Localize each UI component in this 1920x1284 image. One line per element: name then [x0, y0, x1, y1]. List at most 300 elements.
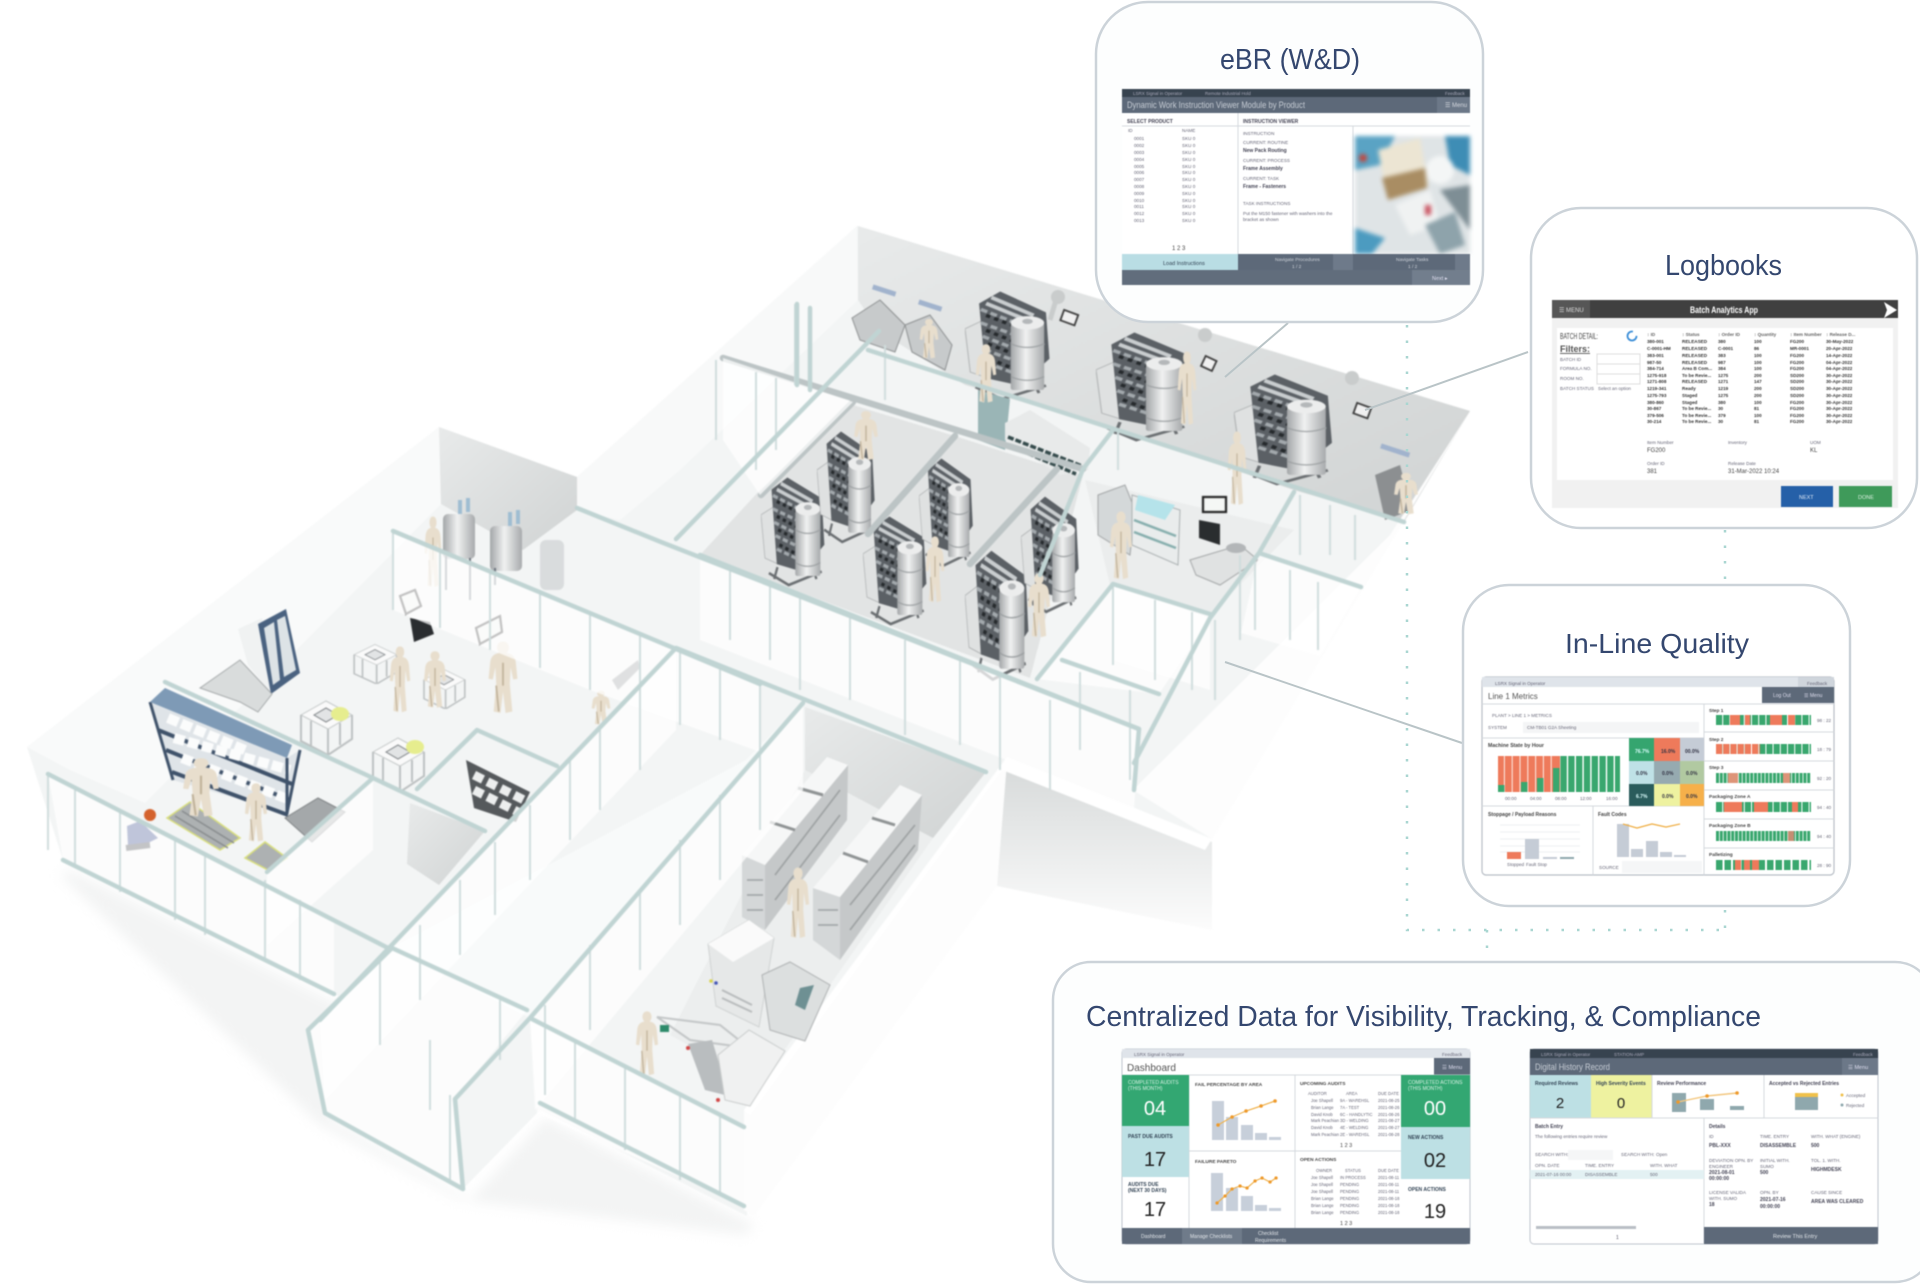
tile: past due audits — [1122, 1126, 1189, 1177]
screen: work instruction viewer: 0004 — [1134, 157, 1145, 162]
dashboard footer tabs: Requirements — [1255, 1238, 1287, 1244]
screen: work instruction viewer: 0013 — [1134, 218, 1145, 223]
table: upcoming audits: 2021-08-26 — [1378, 1112, 1400, 1117]
batch details: 500 — [1811, 1143, 1820, 1149]
table: upcoming audits: 6C - HANDLYTIC — [1340, 1112, 1372, 1117]
screen: batch analytics app: 383 — [1718, 353, 1726, 358]
screen: batch analytics app: C-0001 — [1718, 346, 1734, 351]
table: upcoming audits: 9A - WAREHSL — [1340, 1098, 1370, 1103]
screen: batch analytics app: 200 — [1754, 386, 1762, 391]
screen: batch analytics app: To be Revie... — [1682, 419, 1711, 424]
screen: batch analytics app: 81 — [1754, 419, 1760, 424]
upper wing glass walls — [676, 304, 1404, 810]
batch details: 2021-07-16 — [1760, 1197, 1786, 1203]
screen: batch analytics app: 380-001 — [1647, 339, 1664, 344]
screen: work instruction viewer: INSTRUCTION VIEWER — [1243, 119, 1299, 125]
screen: work instruction viewer: New Pack Routing — [1243, 148, 1287, 154]
tile: required reviews — [1530, 1075, 1591, 1118]
screen: digital history record: LSRX Signal in Operator — [1541, 1052, 1591, 1057]
tile: completed audits: COMPLETED AUDITS — [1128, 1080, 1179, 1086]
screen: batch analytics app: 1271 — [1718, 379, 1729, 384]
screen: batch analytics app: RELEASED — [1682, 346, 1708, 351]
chart: state heatmap — [1629, 738, 1704, 806]
batch details: PBL-XXX — [1709, 1143, 1731, 1149]
screen: work instruction viewer: CURRENT: PROCESS — [1243, 158, 1290, 163]
screen: work instruction viewer: TASK INSTRUCTIONS — [1243, 201, 1290, 206]
screen: work instruction viewer: Feedback — [1445, 91, 1466, 96]
table: upcoming audits — [1300, 1081, 1400, 1149]
table: open actions: PENDING — [1340, 1210, 1359, 1215]
screen: work instruction viewer: Remote Industrial Hold — [1205, 91, 1251, 96]
screen: batch analytics app: 100 — [1754, 339, 1762, 344]
screen: work instruction viewer: Dynamic Work Instruction Viewer Module by Product — [1127, 100, 1305, 111]
table: open actions: PENDING — [1340, 1203, 1359, 1208]
screen: batch analytics app: 100 — [1754, 353, 1762, 358]
screen: batch analytics app: Inventory — [1728, 440, 1748, 445]
upper wing side wall — [577, 226, 858, 520]
screen: batch analytics app: 384 — [1718, 366, 1726, 371]
chart: failure pareto: FAILURE PARETO — [1195, 1159, 1237, 1165]
screen: work instruction viewer: Load Instructions — [1163, 261, 1205, 267]
screen: batch analytics app: 30-Apr-2022 — [1826, 373, 1853, 378]
chart: state heatmap: 16.0% — [1661, 749, 1676, 755]
table: upcoming audits: Joe Shapell — [1311, 1098, 1333, 1103]
tile: audits due: (NEXT 30 DAYS) — [1128, 1188, 1167, 1194]
heading: eBR: eBR (W&D) — [1220, 44, 1360, 76]
table: open actions: Brian Lange — [1311, 1203, 1334, 1208]
equipment room floor — [1085, 480, 1294, 625]
chart: stoppage: Stopped — [1507, 862, 1525, 867]
batch entry list: 500 — [1650, 1172, 1658, 1177]
table: open actions: 2021-08-11 — [1378, 1189, 1400, 1194]
screen: work instruction viewer: INSTRUCTION — [1243, 131, 1274, 136]
tile: open actions: 19 — [1424, 1201, 1446, 1223]
screen: work instruction viewer: SKU 0 — [1182, 136, 1196, 141]
screen: line metrics dashboard: ☰ Menu — [1804, 693, 1823, 699]
tile: audits due: AUDITS DUE — [1128, 1182, 1159, 1188]
screen: batch analytics app: Order ID — [1647, 461, 1665, 466]
screen: batch analytics app: Staged — [1682, 400, 1698, 405]
batch details: ID — [1709, 1134, 1714, 1139]
screen: work instruction viewer: CURRENT: TASK — [1243, 176, 1280, 181]
screen: batch analytics app: FG200 — [1647, 448, 1666, 454]
screen: work instruction viewer: 1 2 3 — [1172, 246, 1186, 252]
screen: batch analytics app: 30-Apr-2022 — [1826, 400, 1853, 405]
screen: work instruction viewer: 0002 — [1134, 143, 1145, 148]
screen: batch analytics app: UOM — [1810, 440, 1821, 445]
screen: work instruction viewer: SKU 0 — [1182, 164, 1196, 169]
chart: state heatmap: 00.0% — [1685, 749, 1700, 755]
screen: batch analytics app: RELEASED — [1682, 339, 1708, 344]
screen: work instruction viewer: 0012 — [1134, 211, 1145, 216]
screen: batch analytics app: BATCH DETAIL: — [1560, 331, 1598, 341]
screen: work instruction viewer: SKU 0 — [1182, 191, 1196, 196]
screen: batch analytics app: Area B Com... — [1682, 366, 1712, 371]
screen: work instruction viewer: NAME — [1182, 128, 1195, 133]
screen: work instruction viewer: SKU 0 — [1182, 170, 1196, 175]
screen: audit dashboard: Feedback — [1442, 1052, 1463, 1057]
chart: machine state bars: 12:00 — [1580, 796, 1592, 801]
screen: batch analytics app: 380-860 — [1647, 400, 1664, 405]
screen: line metrics dashboard: Feedback — [1807, 681, 1828, 686]
screen: batch analytics app: BATCH STATUS — [1560, 386, 1594, 391]
screen: batch analytics app: Item Number — [1647, 440, 1674, 445]
screen: batch analytics app: FG200 — [1790, 366, 1804, 371]
batch details: TOL. 1. WITH. — [1811, 1158, 1841, 1163]
lower wing storage racks — [742, 757, 922, 960]
screen: batch analytics app: 31-Mar-2022 10:24 — [1728, 469, 1780, 475]
batch details: ENGINEER — [1709, 1164, 1734, 1169]
table: open actions: 2021-08-18 — [1378, 1210, 1400, 1215]
corridor floor — [392, 705, 800, 1018]
reactor room floor — [700, 405, 1083, 678]
chart: accepted vs rejected: Accepted — [1846, 1093, 1866, 1098]
chart: station strips: 98 : 22 — [1817, 718, 1831, 723]
screen: digital history record: Digital History Record — [1535, 1062, 1610, 1073]
table: open actions: OPEN ACTIONS — [1300, 1157, 1337, 1163]
screen: batch analytics app: 379 — [1718, 413, 1726, 418]
screen: work instruction viewer: 0005 — [1134, 164, 1145, 169]
screen: batch analytics app: ↕ Quantity — [1754, 332, 1777, 337]
screen: batch analytics app: 100 — [1754, 413, 1762, 418]
chart: machine state bars: 16:00 — [1606, 796, 1618, 801]
T-wall inner face — [997, 762, 1212, 930]
screen: work instruction viewer: SKU 0 — [1182, 184, 1196, 189]
equipment room items — [1098, 485, 1258, 585]
tile: completed audits — [1122, 1075, 1189, 1126]
screen: batch analytics app — [1552, 300, 1898, 508]
table: open actions: 1 2 3 — [1340, 1221, 1352, 1227]
screen: batch analytics app: Filters: — [1560, 344, 1590, 354]
table: open actions: Brian Lange — [1311, 1196, 1334, 1201]
table: upcoming audits: 4E - WELDING — [1340, 1125, 1368, 1130]
screen: batch analytics app: FG200 — [1790, 419, 1804, 424]
screen: batch analytics app: RELEASED — [1682, 353, 1708, 358]
chart: state heatmap: 6.7% — [1636, 794, 1648, 800]
chart: fail percentage by area — [1195, 1082, 1281, 1140]
table: open actions: OWNER — [1316, 1168, 1332, 1173]
batch details: DEVIATION OPN. BY — [1709, 1158, 1753, 1163]
storage room floor — [670, 770, 933, 1085]
chart: review performance — [1657, 1081, 1744, 1112]
table: upcoming audits: AUDITOR — [1308, 1091, 1327, 1096]
screen: work instruction viewer: Frame - Fasteners — [1243, 184, 1286, 190]
screen: work instruction viewer — [1122, 89, 1470, 285]
tile: high severity events — [1591, 1075, 1652, 1118]
tile: open actions — [1408, 1187, 1447, 1223]
left wing lab benches and screens — [301, 590, 640, 792]
screen: batch analytics app: 1275-793 — [1647, 393, 1667, 398]
table: upcoming audits: 2E - WAREHSL — [1340, 1132, 1370, 1137]
tile: audits due — [1128, 1182, 1167, 1221]
building footprint — [27, 226, 1470, 1216]
table: open actions: Joe Shapell — [1311, 1189, 1333, 1194]
batch details: 00:00:00 — [1760, 1204, 1780, 1210]
table: open actions: Joe Shapell — [1311, 1175, 1333, 1180]
lower wing machines — [636, 920, 830, 1106]
screen: digital history record: Feedback — [1853, 1052, 1874, 1057]
batch details: Details — [1709, 1124, 1726, 1130]
screen: work instruction viewer: bracket as shown — [1243, 217, 1279, 222]
ground shadow — [60, 870, 755, 1235]
screen: batch analytics app: 14-Apr-2022 — [1826, 353, 1853, 358]
table: open actions: DUE DATE — [1378, 1168, 1399, 1173]
heading: In-Line Quality: In-Line Quality — [1565, 628, 1749, 659]
chart: fail percentage by area: FAIL PERCENTAGE BY AREA — [1195, 1082, 1263, 1088]
screen: batch analytics app: Staged — [1682, 393, 1698, 398]
screen: work instruction viewer: 0011 — [1134, 204, 1144, 209]
screen: line metrics dashboard: Fault Codes — [1598, 812, 1627, 818]
chart: station strips: 94 : 40 — [1817, 805, 1831, 810]
instruction photo — [1355, 136, 1470, 254]
screen: work instruction viewer: Next ▸ — [1432, 276, 1448, 282]
right outer wall — [1133, 411, 1470, 839]
screen: batch analytics app: 81 — [1754, 406, 1760, 411]
dashboard footer tabs: Manage Checklists — [1190, 1234, 1233, 1240]
batch entry list: WITH. WHAT — [1650, 1163, 1678, 1168]
tile: new actions — [1401, 1127, 1470, 1179]
chart: stoppage: Fault Stop — [1526, 862, 1547, 867]
panel: In-Line Quality — [1463, 585, 1850, 906]
screen: work instruction viewer: 1 / 2 — [1408, 264, 1418, 270]
chart: station strips — [1709, 708, 1831, 868]
tile: high severity events: 0 — [1617, 1095, 1625, 1112]
screen: work instruction viewer: ID — [1128, 128, 1133, 133]
table: open actions: PENDING — [1340, 1182, 1359, 1187]
screen: line metrics dashboard: PLANT > LINE 1 > METRICS — [1492, 713, 1552, 718]
chart: state heatmap: 0.0% — [1662, 771, 1674, 777]
callout leader lines — [1225, 323, 1528, 743]
screen: batch analytics app: 30-Apr-2022 — [1826, 386, 1853, 391]
chart: machine state bars: 04:00 — [1530, 796, 1542, 801]
screen: batch analytics app: 30-Apr-2022 — [1826, 379, 1853, 384]
screen: batch analytics app: 380 — [1718, 339, 1726, 344]
batch entry list: 1 — [1616, 1235, 1619, 1241]
screen: batch analytics app: 30-May-2022 — [1826, 339, 1854, 344]
screen: batch analytics app: ☰ MENU — [1559, 307, 1584, 314]
left wing closet shelf — [466, 760, 530, 822]
screen: audit dashboard: LSRX Signal in Operator — [1134, 1052, 1185, 1057]
screen: batch analytics app: To be Revie... — [1682, 413, 1711, 418]
chart: state heatmap: 76.7% — [1635, 749, 1650, 755]
screen: work instruction viewer: SKU 0 — [1182, 150, 1196, 155]
screen: audit dashboard — [1122, 1049, 1470, 1244]
left wing sink and benches — [167, 798, 345, 870]
screen: batch analytics app: ↕ ID — [1647, 332, 1656, 337]
screen: batch analytics app: 379-506 — [1647, 413, 1664, 418]
batch entry list: The following entries require review — [1535, 1134, 1608, 1139]
table: open actions: STATUS — [1345, 1168, 1361, 1173]
panel: eBR (W&D) — [1096, 2, 1483, 322]
table: open actions: 2021-08-18 — [1378, 1203, 1400, 1208]
table: upcoming audits: 2021-08-27 — [1378, 1125, 1400, 1130]
batch details: AREA WAS CLEARED — [1811, 1199, 1864, 1205]
screen: audit dashboard: Dashboard — [1127, 1063, 1176, 1074]
table: upcoming audits: 2021-08-28 — [1378, 1132, 1400, 1137]
table: upcoming audits: Brian Lange — [1311, 1105, 1334, 1110]
screen: work instruction viewer: Navigate Procedures — [1275, 257, 1320, 263]
screen: batch analytics app: 1271-808 — [1647, 379, 1667, 384]
chart: fault codes — [1599, 824, 1702, 873]
screen: work instruction viewer: SKU 0 — [1182, 211, 1196, 216]
table: upcoming audits: 2021-08-26 — [1378, 1105, 1400, 1110]
screen: batch analytics app: 30 — [1718, 419, 1724, 424]
table: upcoming audits: 2021-08-25 — [1378, 1098, 1400, 1103]
table: upcoming audits: 7A - TEST — [1340, 1105, 1360, 1110]
screen: work instruction viewer: CURRENT: ROUTINE — [1243, 140, 1288, 145]
screen: batch analytics app: 1275 — [1718, 393, 1729, 398]
upper wing grey back wall — [858, 226, 1470, 522]
screen: batch analytics app: SD200 — [1790, 386, 1804, 391]
screen: digital history record: ☰ Menu — [1848, 1064, 1868, 1071]
dashboard footer tabs: Dashboard — [1141, 1234, 1166, 1240]
screen: work instruction viewer: SKU 0 — [1182, 157, 1196, 162]
screen: work instruction viewer: 0003 — [1134, 150, 1145, 155]
table: open actions: 2021-08-11 — [1378, 1175, 1400, 1180]
wall top band — [744, 757, 1212, 1115]
screen: batch analytics app: 200 — [1754, 373, 1762, 378]
chart: state heatmap: 0.0% — [1686, 794, 1698, 800]
tile: completed actions: (THIS MONTH) — [1408, 1086, 1443, 1092]
screen: batch analytics app: MR-0001 — [1790, 346, 1809, 351]
screen: batch analytics app: 30-Apr-2022 — [1826, 419, 1853, 424]
batch details: LICENSE VALIDA — [1709, 1190, 1747, 1195]
chart: state heatmap: 0.0% — [1662, 794, 1674, 800]
chart: station strips: Step 1 — [1709, 708, 1724, 714]
screen: batch analytics app: 383-001 — [1647, 353, 1664, 358]
chart: state heatmap: 0.0% — [1686, 771, 1698, 777]
screen: batch analytics app: 04-Apr-2022 — [1826, 360, 1853, 365]
screen: work instruction viewer: SELECT PRODUCT — [1127, 119, 1173, 125]
icon: refresh — [1628, 332, 1636, 340]
batch details: WITH. SUMO — [1709, 1196, 1737, 1201]
batch details: 2021-08-01 — [1709, 1170, 1735, 1176]
table: open actions: PENDING — [1340, 1196, 1359, 1201]
screen: batch analytics app: FG200 — [1790, 400, 1804, 405]
screen: work instruction viewer: 0001 — [1134, 136, 1145, 141]
screen: work instruction viewer: SKU 0 — [1182, 143, 1196, 148]
table: open actions: IN PROCESS — [1340, 1175, 1366, 1180]
tile: new actions: 02 — [1424, 1150, 1446, 1172]
button: review this entry: Review This Entry — [1773, 1234, 1817, 1240]
table: open actions: Joe Shapell — [1311, 1182, 1333, 1187]
table: upcoming audits: David Knob — [1311, 1125, 1333, 1130]
screen: line metrics dashboard: Machine State by Hour — [1488, 743, 1544, 749]
screen: batch analytics app: 30-867 — [1647, 406, 1662, 411]
screen: batch analytics app: RELEASED — [1682, 379, 1708, 384]
tile: completed audits: (THIS MONTH) — [1128, 1086, 1163, 1092]
table: upcoming audits: DUE DATE — [1378, 1091, 1399, 1096]
chart: station strips: Step 3 — [1709, 765, 1724, 771]
screen: batch analytics app: Batch Analytics App — [1690, 305, 1758, 316]
batch details: WITH. WHAT (ENGINE) — [1811, 1134, 1861, 1139]
screen: work instruction viewer: 0007 — [1134, 177, 1145, 182]
chart: station strips: 18 : 79 — [1817, 747, 1831, 752]
screen: batch analytics app: 100 — [1754, 400, 1762, 405]
screen: batch analytics app: 987 — [1718, 360, 1726, 365]
table: upcoming audits: Mark Peachian — [1311, 1118, 1340, 1123]
heading: Logbooks: Logbooks — [1665, 250, 1782, 282]
batch details: 18 — [1709, 1202, 1715, 1208]
screen: line metrics dashboard: Log Out — [1773, 693, 1791, 699]
panel: Logbooks — [1531, 208, 1917, 528]
people in upper wing — [854, 319, 1418, 637]
chart: station strips: Step 2 — [1709, 737, 1724, 743]
screen: work instruction viewer: Navigate Tasks — [1396, 257, 1429, 263]
screen: batch analytics app: 30-Apr-2022 — [1826, 406, 1853, 411]
screen: batch analytics app: FG200 — [1790, 360, 1804, 365]
left wing blue cabinet — [238, 609, 300, 694]
table: open actions: Brian Lange — [1311, 1210, 1334, 1215]
screen: batch analytics app: SD200 — [1790, 379, 1804, 384]
screen: batch analytics app: 100 — [1754, 360, 1762, 365]
lower wing outer wall — [744, 757, 1007, 1216]
batch details: SUMO — [1760, 1164, 1774, 1169]
chart: fault codes: SOURCE — [1599, 865, 1619, 870]
screen: batch analytics app: 20-Apr-2022 — [1826, 346, 1853, 351]
screen: batch analytics app: Release Date — [1728, 461, 1756, 466]
screen: line metrics dashboard: SYSTEM — [1488, 725, 1507, 730]
screen: batch analytics app: ↕ Order ID — [1718, 332, 1741, 337]
screen: batch analytics app: 1275 — [1718, 373, 1729, 378]
screen: batch analytics app: 100 — [1754, 366, 1762, 371]
batch details — [1709, 1124, 1864, 1210]
batch entry list: Batch Entry — [1535, 1124, 1563, 1130]
batch details: OPN. BY — [1760, 1190, 1779, 1195]
left wing rear wall faces — [27, 427, 441, 803]
screen: batch analytics app: 04-Apr-2022 — [1826, 366, 1853, 371]
table: open actions: 2021-08-11 — [1378, 1182, 1400, 1187]
chart: station strips: Packaging Zone A — [1709, 794, 1751, 800]
chart: review performance: Review Performance — [1657, 1081, 1706, 1087]
screen: work instruction viewer: Frame Assembly — [1243, 166, 1283, 172]
screen: line metrics dashboard: CM-TB01 G2A Sheeting — [1527, 725, 1577, 730]
screen: batch analytics app: 1219-341 — [1647, 386, 1667, 391]
screen: work instruction viewer: SKU 0 — [1182, 177, 1196, 182]
table: upcoming audits: 1 2 3 — [1340, 1143, 1352, 1149]
table: upcoming audits: David Knob — [1311, 1112, 1333, 1117]
screen: batch analytics app: ↕ Item Number — [1790, 332, 1822, 337]
upper wing pipes — [723, 358, 1083, 564]
screen: batch analytics app: 987-50 — [1647, 360, 1662, 365]
batch details: TIME. ENTRY — [1760, 1134, 1789, 1139]
screen: batch analytics app: 30 — [1718, 406, 1724, 411]
screen: batch analytics app: 1219 — [1718, 386, 1729, 391]
left wing lab sink counter — [200, 660, 272, 712]
batch details: INITIAL WITH. — [1760, 1158, 1790, 1163]
heading: Centralized Data: Centralized Data for Visibility, Tracking, & Compliance — [1086, 1001, 1761, 1033]
screen: batch analytics app: FG200 — [1790, 339, 1804, 344]
screen: batch analytics app: ROOM NO. — [1560, 376, 1584, 381]
screen: work instruction viewer: LSRX Signal in Operator — [1133, 91, 1183, 96]
screen: batch analytics app: 200 — [1754, 393, 1762, 398]
chart: machine state bars: 00:00 — [1505, 796, 1517, 801]
screen: work instruction viewer: 0006 — [1134, 170, 1145, 175]
screen: work instruction viewer: SKU 0 — [1182, 198, 1196, 203]
tile: required reviews: Required Reviews — [1535, 1081, 1578, 1087]
screen: batch analytics app: 380 — [1718, 400, 1726, 405]
screen: batch analytics app: To be Revie... — [1682, 373, 1711, 378]
screen: batch analytics app: 86 — [1754, 346, 1760, 351]
left and corridor glass walls — [48, 508, 1139, 1206]
screen: batch analytics app: SD200 — [1790, 393, 1804, 398]
tile: completed actions: 00 — [1424, 1098, 1446, 1120]
table: upcoming audits: 2021-08-27 — [1378, 1118, 1400, 1123]
screen: work instruction viewer: 0008 — [1134, 184, 1145, 189]
screen: work instruction viewer: SKU 0 — [1182, 204, 1196, 209]
batch entry list: Open — [1656, 1152, 1668, 1157]
screen: batch analytics app: FG200 — [1790, 413, 1804, 418]
